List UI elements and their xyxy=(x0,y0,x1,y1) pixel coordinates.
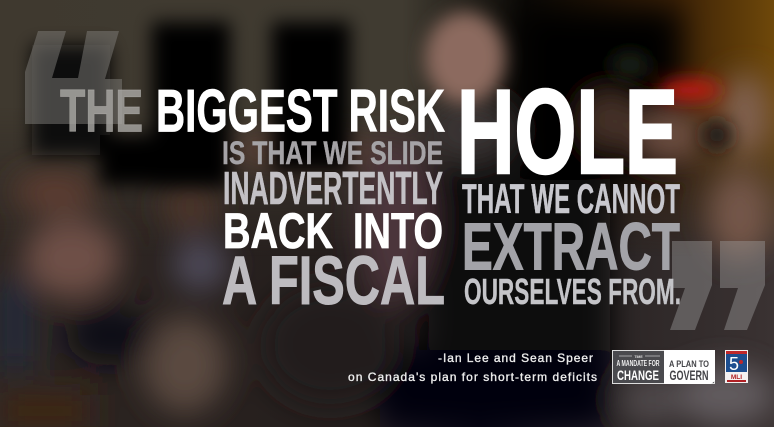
text: THE: THE xyxy=(60,78,143,144)
logo: a mandate for change, a plan to govern: TIME xyxy=(634,355,643,359)
text: IS THAT WE SLIDE: IS THAT WE SLIDE xyxy=(222,135,443,171)
logo: a mandate for change, a plan to govern: CHANGE xyxy=(617,367,659,383)
logo: MLI 5th anniversary: MLI xyxy=(731,374,742,381)
logo: a mandate for change, a plan to govern xyxy=(612,350,715,384)
text: BACK INTO xyxy=(223,203,443,259)
attribution xyxy=(348,351,597,384)
logo: MLI 5th anniversary xyxy=(725,350,748,383)
icon: opening quotation mark xyxy=(25,31,122,124)
text: A FISCAL: A FISCAL xyxy=(222,242,445,319)
text: source description: on Canada's plan for short-term deficits xyxy=(348,370,597,384)
quote: left column xyxy=(60,78,445,319)
text: BACK INTO: INTO xyxy=(353,203,443,259)
text: BACK INTO: BACK xyxy=(223,203,333,259)
logo: a mandate for change, a plan to govern: GOVERN xyxy=(670,367,708,383)
icon: closing quotation mark xyxy=(670,241,765,330)
text: EXTRACT: EXTRACT xyxy=(462,210,680,284)
logo: a mandate for change, a plan to govern: A PLAN TO xyxy=(669,359,709,369)
text: BIGGEST RISK: BIGGEST RISK xyxy=(156,78,445,144)
logo: a mandate for change, a plan to govern: A MANDATE FOR xyxy=(616,359,660,368)
text: authors: -Ian Lee and Sean Speer xyxy=(438,351,593,365)
logo: MLI 5th anniversary: 5 xyxy=(729,354,739,374)
text: INADVERTENTLY: INADVERTENTLY xyxy=(223,162,443,214)
quote: right column xyxy=(457,65,681,312)
